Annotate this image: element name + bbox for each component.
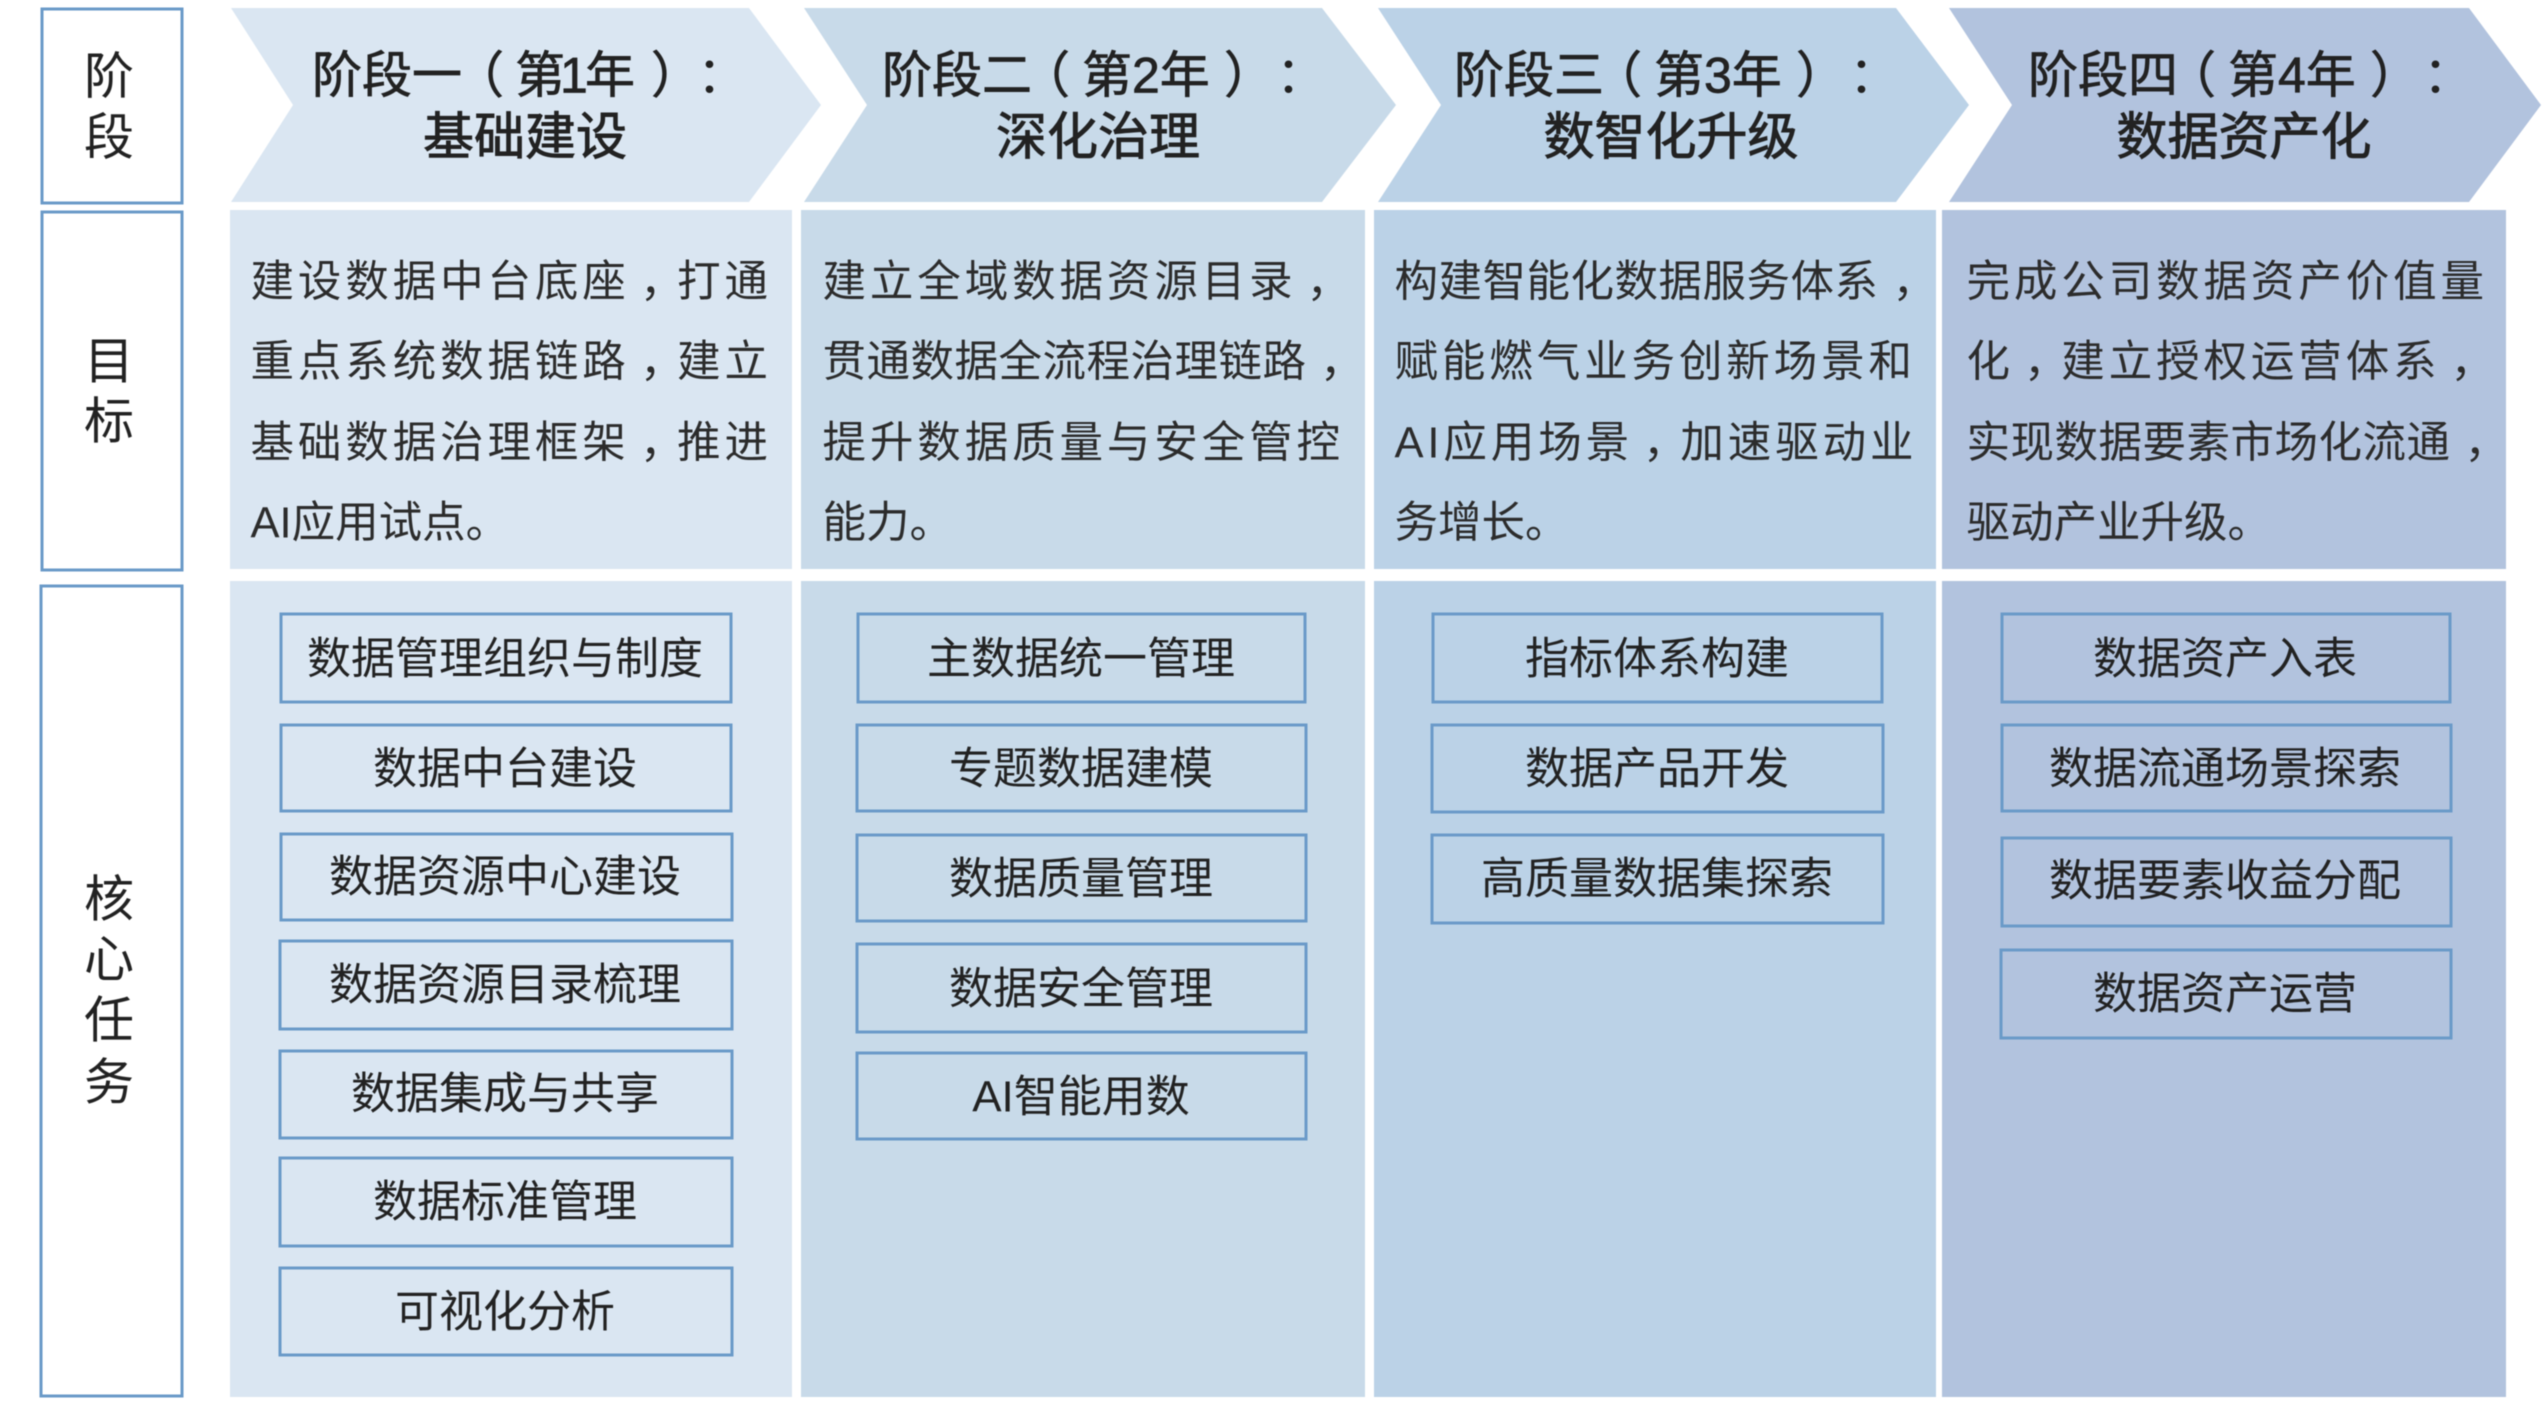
goal panel 1: ， <box>640 420 687 468</box>
task: 主数据统一管理 <box>858 614 1305 702</box>
goal panel 2: ， <box>1306 258 1354 306</box>
stage arrow 1: ： <box>697 48 747 104</box>
goal panel 2: ， <box>1320 338 1364 386</box>
goal panel 2: 提升数据质量与安全管控 <box>822 420 1344 468</box>
task: 数据资产入表: 数据资产入表 <box>2093 634 2357 684</box>
goal panel 3: ， <box>1892 258 1936 306</box>
stage arrow 2 <box>804 8 1396 202</box>
task panel 3 <box>1374 581 1936 1397</box>
goal panel 2 <box>801 210 1365 569</box>
row label: 目标: 目 <box>84 334 134 390</box>
task: 可视化分析: 可视化分析 <box>395 1288 615 1336</box>
stage arrow 1: 1 <box>560 48 588 104</box>
stage arrow 3: ： <box>1849 48 1899 104</box>
goal panel 4: ， <box>2450 338 2498 386</box>
goal panel 2: 能力。 <box>822 500 953 548</box>
stage arrow 1: ） <box>651 48 701 104</box>
task: 数据流通场景探索 <box>2002 725 2451 811</box>
stage arrow 2: 深化治理 <box>996 108 1200 166</box>
task: 数据产品开发 <box>1432 725 1883 812</box>
task: 数据资产运营 <box>2001 950 2451 1038</box>
row label: 目标 <box>42 212 182 570</box>
task: 数据集成与共享 <box>280 1051 732 1138</box>
goal panel 1: 推进 <box>677 420 772 468</box>
stage arrow 3: （ <box>1592 48 1642 104</box>
task: 主数据统一管理: 主数据统一管理 <box>927 634 1235 684</box>
task: 数据标准管理 <box>280 1158 732 1246</box>
goal panel 1: ， <box>640 258 687 306</box>
goal panel 1: 建设数据中台底座 <box>250 258 630 306</box>
stage arrow 1: 年 <box>585 48 635 104</box>
task: 数据管理组织与制度: 数据管理组织与制度 <box>307 634 703 684</box>
stage arrow 2: ） <box>1224 48 1274 104</box>
task panel 2 <box>801 581 1365 1397</box>
goal panel 4: 建立授权运营体系 <box>2061 338 2441 386</box>
task: 数据资源目录梳理: 数据资源目录梳理 <box>329 960 681 1010</box>
row label: 核心任务: 心 <box>84 932 134 988</box>
task: 数据集成与共享: 数据集成与共享 <box>351 1070 659 1118</box>
task: 数据资产运营: 数据资产运营 <box>2093 970 2357 1018</box>
goal panel 1: 打通 <box>677 258 772 306</box>
task: 数据资源中心建设 <box>281 834 732 920</box>
stage arrow 3: 数智化升级 <box>1543 108 1799 166</box>
stage arrow 4: 第4年 <box>2228 48 2356 104</box>
goal panel 3: ， <box>1643 420 1690 468</box>
stage arrow 4 <box>1949 8 2541 202</box>
goal panel 4: 完成公司数据资产价值量 <box>1966 258 2488 306</box>
goal panel 3: 构建智能化数据服务体系 <box>1394 258 1878 306</box>
goal panel 3: AI应用场景 <box>1394 420 1633 468</box>
goal panel 4: 实现数据要素市场化流通 <box>1966 420 2450 468</box>
task: 指标体系构建: 指标体系构建 <box>1525 634 1789 684</box>
goal panel 1: ， <box>640 338 687 386</box>
task: 高质量数据集探索: 高质量数据集探索 <box>1481 854 1833 904</box>
row label: 核心任务 <box>41 586 182 1396</box>
stage arrow 3: 阶段三 <box>1454 48 1604 104</box>
task: 数据安全管理 <box>857 944 1306 1032</box>
task: 数据资源中心建设: 数据资源中心建设 <box>329 852 681 902</box>
stage arrow 4: 数据资产化 <box>2116 108 2372 166</box>
goal panel 2: 贯通数据全流程治理链路 <box>822 338 1306 386</box>
stage arrow 2: 第2年 <box>1082 48 1210 104</box>
row label: 核心任务: 务 <box>84 1054 134 1110</box>
task: 可视化分析 <box>280 1268 732 1355</box>
task: 数据资产入表 <box>2002 614 2450 702</box>
task: 数据产品开发: 数据产品开发 <box>1525 744 1789 794</box>
stage arrow 4: ： <box>2423 48 2473 104</box>
stage arrow 4: ） <box>2370 48 2420 104</box>
goal panel 4: ， <box>2464 420 2508 468</box>
goal panel 4: 驱动产业升级。 <box>1966 500 2271 548</box>
goal panel 3: 加速驱动业 <box>1680 420 1917 468</box>
stage arrow 1: 阶段一 <box>312 48 462 104</box>
goal panel 1: 建立 <box>677 338 772 386</box>
row label: 阶段 <box>42 9 182 203</box>
row label: 目标: 标 <box>84 394 134 450</box>
stage arrow 3 <box>1378 8 1969 202</box>
goal panel 1: 重点系统数据链路 <box>250 338 630 386</box>
stage arrow 2: ： <box>1276 48 1326 104</box>
goal panel 4: 化 <box>1966 338 2014 386</box>
task: 指标体系构建 <box>1433 614 1882 702</box>
task: 数据管理组织与制度 <box>281 614 731 702</box>
goal panel 1: AI应用试点。 <box>250 500 509 548</box>
task: 数据标准管理: 数据标准管理 <box>373 1178 637 1226</box>
goal panel 2: 建立全域数据资源目录 <box>822 258 1296 306</box>
stage arrow 1 <box>231 8 821 202</box>
row label: 核心任务: 任 <box>84 992 134 1048</box>
goal panel 1 <box>230 210 792 569</box>
stage arrow 4: （ <box>2166 48 2216 104</box>
task: 专题数据建模 <box>857 725 1306 811</box>
row label: 核心任务: 核 <box>84 872 134 928</box>
task panel 4 <box>1942 581 2506 1397</box>
task: 数据中台建设: 数据中台建设 <box>373 744 637 794</box>
stage arrow 1: 第 <box>515 48 565 104</box>
stage arrow 1: 基础建设 <box>423 108 627 166</box>
task: 数据质量管理 <box>857 835 1306 921</box>
task: 数据安全管理: 数据安全管理 <box>949 964 1213 1014</box>
task: AI智能用数 <box>857 1053 1306 1139</box>
row label: 阶段: 段 <box>84 110 134 166</box>
task: 数据资源目录梳理 <box>280 941 732 1029</box>
stage arrow 1: （ <box>454 48 504 104</box>
row label: 阶段: 阶 <box>84 48 134 104</box>
task panel 1 <box>230 581 792 1397</box>
stage arrow 2: 阶段二 <box>882 48 1032 104</box>
stage arrow 4: 阶段四 <box>2028 48 2178 104</box>
task: AI智能用数: AI智能用数 <box>972 1072 1190 1122</box>
stage arrow 3: 第3年 <box>1654 48 1782 104</box>
goal panel 3: 赋能燃气业务创新场景和 <box>1394 338 1916 386</box>
task: 数据要素收益分配 <box>2002 838 2451 926</box>
goal panel 1: 基础数据治理框架 <box>250 420 630 468</box>
goal panel 3: 务增长。 <box>1394 500 1568 548</box>
task: 数据要素收益分配: 数据要素收益分配 <box>2049 856 2401 906</box>
stage arrow 2: （ <box>1020 48 1070 104</box>
goal panel 4 <box>1942 210 2508 569</box>
task: 高质量数据集探索 <box>1432 835 1883 923</box>
task: 数据质量管理: 数据质量管理 <box>949 854 1213 904</box>
task: 数据中台建设 <box>281 725 731 811</box>
task: 数据流通场景探索: 数据流通场景探索 <box>2049 744 2401 794</box>
stage arrow 3: ） <box>1796 48 1846 104</box>
goal panel 3 <box>1374 210 1936 569</box>
task: 专题数据建模: 专题数据建模 <box>949 744 1213 794</box>
goal panel 4: ， <box>2024 338 2071 386</box>
